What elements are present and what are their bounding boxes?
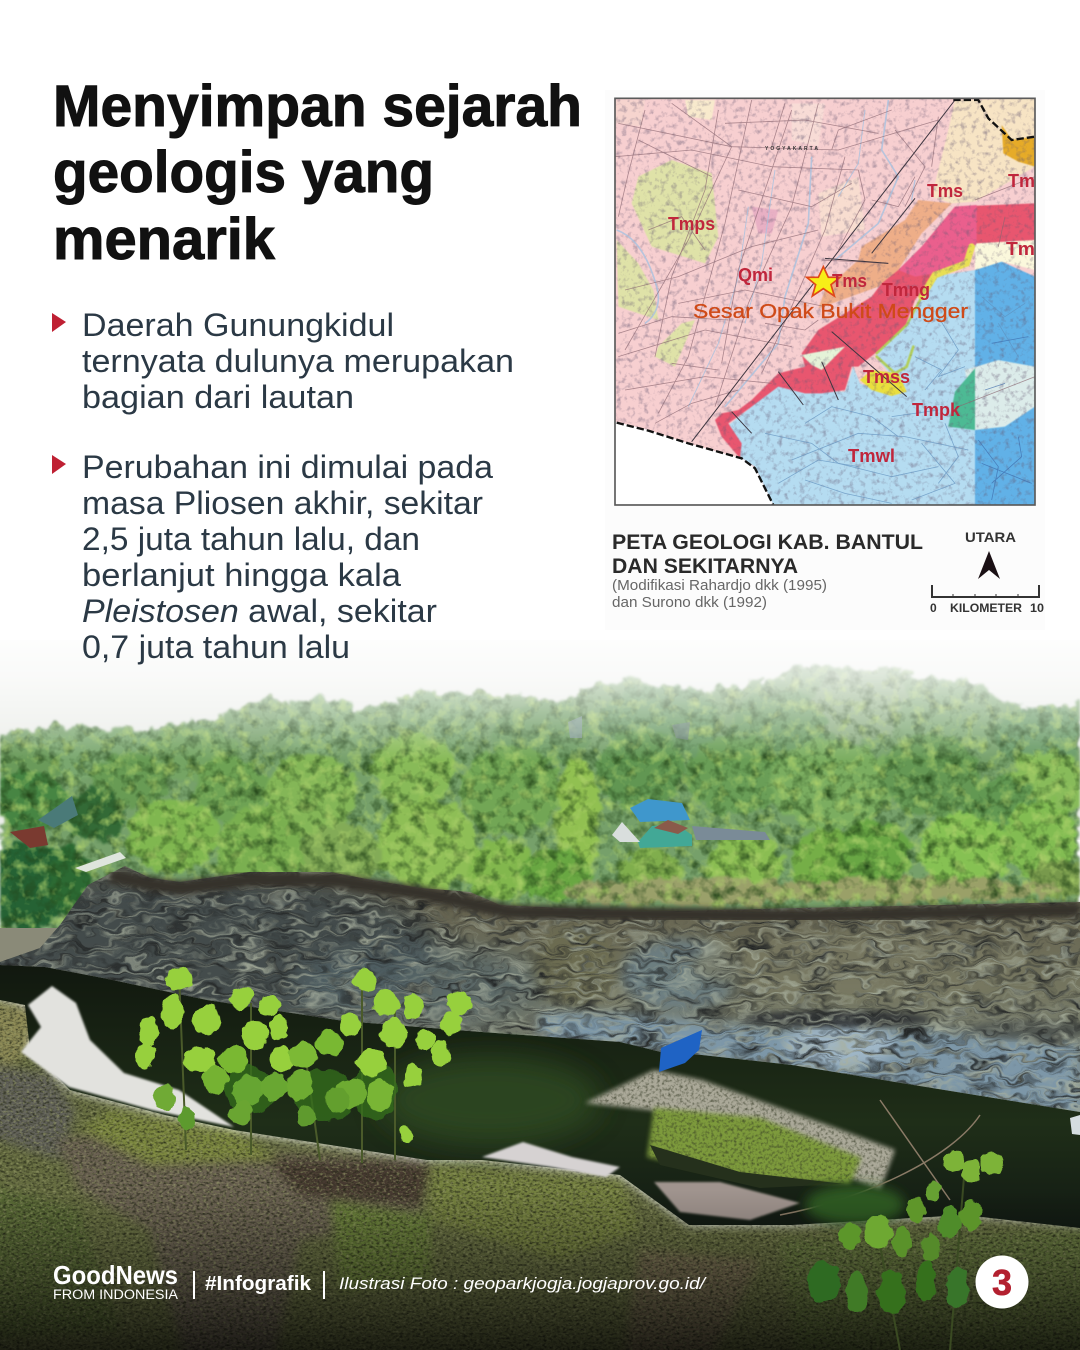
map scale bar: 0 [930, 601, 937, 615]
dark fade at the bottom [0, 1190, 1080, 1350]
map: pale and dark alluvium patches [685, 100, 864, 236]
map: eastern blue unit [975, 262, 1035, 505]
cliff olive patches [536, 948, 612, 1005]
map scale bar: KILOMETER [950, 601, 1022, 615]
title [53, 74, 582, 272]
houses in trees [10, 716, 770, 872]
map caption [612, 531, 923, 611]
bright young saplings [135, 967, 470, 1163]
map unit labels: Tmpk [912, 400, 961, 420]
bullet text 2: masa Pliosen akhir, sekitar [82, 485, 483, 521]
map unit labels: Qmi [738, 265, 773, 285]
title: geologis yang [53, 140, 434, 205]
bullet text 2: 2,5 juta tahun lalu, dan [82, 521, 420, 557]
sapling bright leaves [135, 967, 470, 1144]
map: limestone details [765, 297, 1032, 503]
north arrow [965, 529, 1016, 579]
map: pale patch at river [802, 347, 845, 370]
map caption: DAN SEKITARNYA [612, 555, 798, 578]
map: top-right unit [932, 98, 1035, 203]
map unit labels: Tmwl [848, 446, 895, 466]
map unit labels: Tmss [863, 367, 910, 387]
logo GoodNews: GoodNews [53, 1260, 178, 1290]
logo GoodNews [53, 1260, 178, 1302]
map unit labels: Tmps [668, 214, 715, 234]
bullet text 1 [82, 307, 514, 415]
map: limestone unit [727, 270, 975, 505]
cliff lower blue band [540, 1012, 1080, 1115]
map: fault lines [692, 100, 955, 442]
logo GoodNews: FROM INDONESIA [53, 1287, 178, 1302]
geological map [615, 98, 1035, 505]
map unit labels: Tms [927, 181, 963, 201]
map: tan unit [818, 200, 952, 308]
dry branches and right shrubs [780, 1100, 980, 1225]
brown grass fringe on cliff top [110, 876, 1080, 916]
bullet icon 1 [52, 313, 66, 332]
photo credit: Ilustrasi Foto : geoparkjogja.jogjaprov.go.id/ [339, 1275, 707, 1293]
bullet text 1: bagian dari lautan [82, 379, 354, 415]
map: river network [617, 100, 915, 407]
map panel background [605, 90, 1045, 630]
map: olive unit [617, 160, 718, 367]
map: roads [615, 100, 1035, 423]
city label on map: YOGYAKARTA [765, 146, 818, 152]
tree canopy background [0, 668, 1080, 930]
sky haze [0, 640, 1080, 840]
map unit labels: Tms [832, 271, 867, 291]
cliff dark ledge [740, 1010, 930, 1028]
bullet text 2: berlanjut hingga kala [82, 557, 401, 593]
title: menarik [53, 207, 276, 272]
map unit labels: Tm [1006, 239, 1035, 259]
map: dashed boundary [617, 100, 1035, 505]
bullet text 1: Daerah Gunungkidul [82, 307, 394, 343]
bullet text 2: Perubahan ini dimulai pada [82, 449, 493, 485]
map caption: PETA GEOLOGI KAB. BANTUL [612, 531, 923, 554]
hashtag: #Infografik [205, 1273, 312, 1295]
map: yellow Tmss lens [860, 370, 907, 396]
map: yellow fringe [877, 247, 972, 373]
photo: quarry cliff landscape [0, 620, 1080, 1350]
sand spit and mossy island [585, 1070, 1080, 1190]
map caption: (Modifikasi Rahardjo dkk (1995) [612, 578, 827, 594]
map unit labels: Tm [1008, 171, 1035, 191]
bullet text 1: ternyata dulunya merupakan [82, 343, 514, 379]
map scale bar: 10 [1030, 601, 1044, 615]
bullet text 2: Pleistosen awal, sekitar [82, 593, 437, 629]
map: green unit [948, 368, 975, 430]
footer branding [53, 1260, 707, 1302]
cliff dark left massif [0, 870, 440, 1030]
fault label: Sesar Opak Bukit Mengger [693, 301, 968, 323]
map scale bar [930, 585, 1044, 615]
page white fade over treetops [0, 620, 1080, 760]
foreground sapling bottom right [807, 1151, 1080, 1350]
bullet text 2: 0,7 juta tahun lalu [82, 629, 350, 665]
sapling shaded foliage [224, 1060, 397, 1121]
map border [615, 98, 1035, 505]
page number badge [976, 1256, 1028, 1308]
map: red unit [715, 203, 1035, 458]
green water reflection [380, 1056, 600, 1144]
bullet icon 2 [52, 455, 66, 474]
map base: alluvium [615, 98, 1035, 505]
map: magenta patch [898, 205, 977, 277]
limestone cliff [0, 860, 1080, 1120]
map: cream unit [975, 240, 1035, 270]
cliff bluish upper patch [620, 939, 740, 1011]
map unit labels: Tmng [882, 280, 930, 300]
page number badge: 3 [992, 1262, 1012, 1303]
map: pale band [965, 360, 1035, 430]
blue tarp [659, 1030, 702, 1072]
ground at left [0, 928, 60, 965]
bullet text 2 [82, 449, 493, 665]
dark pond water [0, 965, 1080, 1228]
ground and grass foreground [0, 990, 1080, 1350]
map unit labels [668, 171, 1035, 466]
north arrow: UTARA [965, 529, 1016, 545]
map caption: dan Surono dkk (1992) [612, 595, 767, 611]
sky reflections on water [21, 986, 800, 1220]
title: Menyimpan sejarah [53, 74, 582, 139]
map: gold unit [1002, 125, 1035, 167]
map: star location [807, 267, 840, 296]
map: sea [615, 422, 773, 505]
